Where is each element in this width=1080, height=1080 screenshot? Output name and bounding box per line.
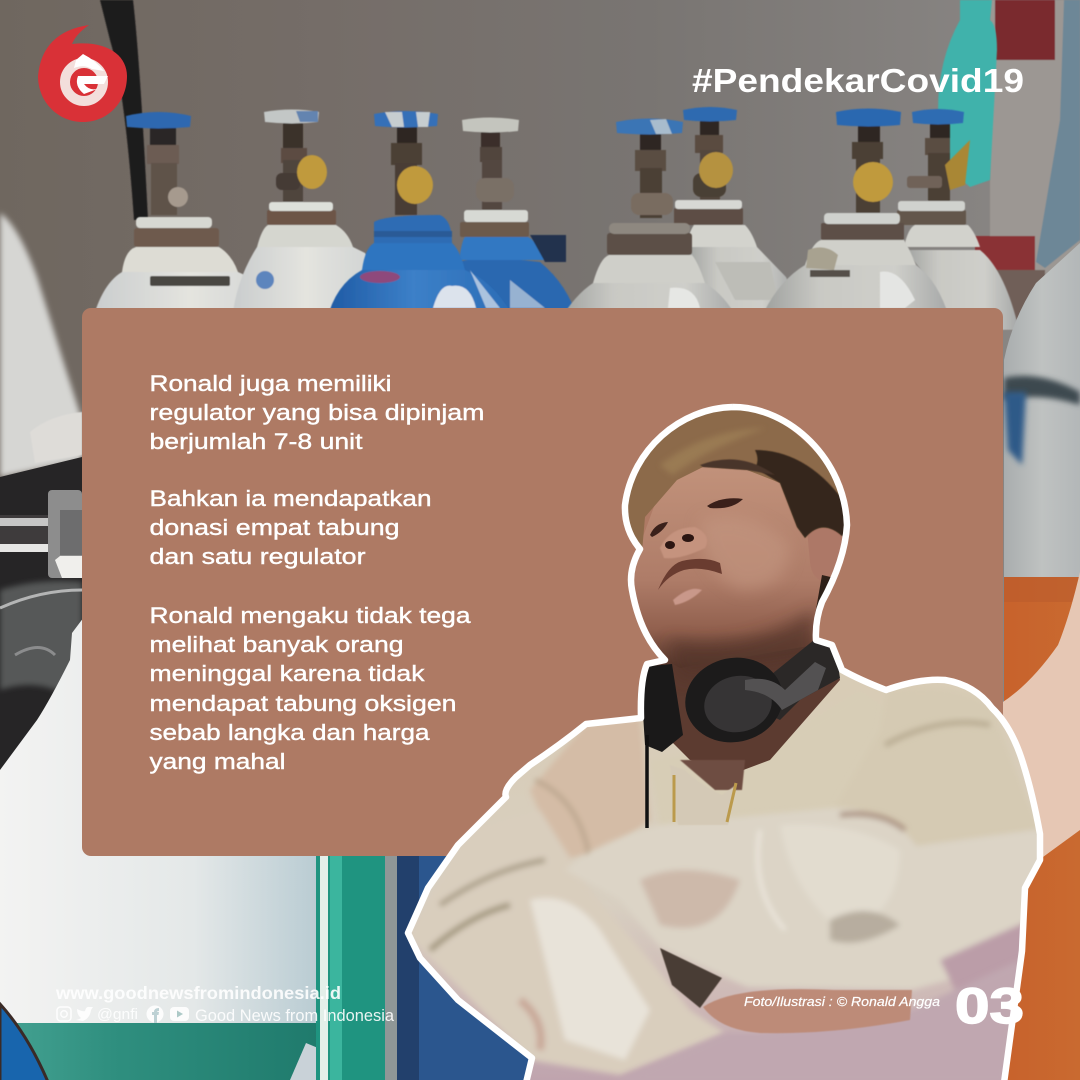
text block: body paragraphs: Bahkan ia mendapatkan — [150, 486, 432, 511]
icon: instagram — [57, 1007, 71, 1021]
text block: body paragraphs: yang mahal — [150, 749, 286, 774]
ear — [808, 536, 814, 558]
right upper arm — [856, 788, 1035, 844]
cylinder 6 — [674, 107, 795, 320]
page name: Good News from Indonesia — [195, 1007, 395, 1025]
left shoulder and sleeve — [408, 718, 725, 1075]
photo credit: Foto/Ilustrasi : © Ronald Angga — [744, 994, 940, 1009]
footer: website and social handles: www.goodnewsfromindonesia.id — [55, 983, 341, 1003]
page number: 03 — [955, 978, 1024, 1034]
headphones — [640, 640, 840, 752]
icon: twitter — [76, 1007, 93, 1021]
right side cylinder — [1004, 243, 1080, 1080]
left side dark equipment and fittings — [0, 412, 82, 780]
eyes, nose, mouth — [650, 498, 743, 605]
chest tattoo and collar — [680, 760, 745, 790]
person cutout: Ronald — [400, 405, 1050, 1080]
text block: body paragraphs: meninggal karena tidak — [150, 661, 425, 686]
text block: body paragraphs: dan satu regulator — [150, 544, 366, 569]
hashtag heading: #PendekarCovid19 — [692, 63, 1024, 100]
text block: body paragraphs: sebab langka dan harga — [150, 720, 430, 745]
text block: body paragraphs: donasi empat tabung — [150, 515, 400, 540]
arm raised behind the person — [1000, 572, 1080, 857]
chest — [650, 690, 900, 828]
hair — [628, 410, 842, 547]
text block: body paragraphs: Ronald juga memiliki — [150, 371, 392, 396]
icon: facebook — [146, 1006, 164, 1023]
headphone wire — [645, 735, 649, 828]
teal hanging device — [938, 0, 997, 187]
panel: brown text card — [82, 308, 1003, 856]
head skin — [636, 467, 818, 656]
blue cylinder 3 (front) — [327, 111, 515, 320]
green cylinder — [0, 1023, 318, 1080]
text block: body paragraphs: regulator yang bisa dipinjam — [150, 400, 484, 425]
text block: body paragraphs — [150, 371, 484, 774]
text block: body paragraphs: melihat banyak orang — [150, 632, 404, 657]
logo: red GNFI badge — [38, 25, 127, 122]
blue cylinder 4 (behind) — [459, 118, 578, 320]
white plastic jug — [0, 617, 322, 1024]
right shelving and red box — [975, 0, 1080, 330]
teal and navy cylinders — [316, 850, 547, 1080]
neck — [653, 646, 840, 770]
cylinder 8 — [897, 109, 1019, 330]
blue corner object — [0, 1004, 48, 1080]
lower shirt — [692, 966, 1016, 1048]
text block: body paragraphs: Ronald mengaku tidak tega — [150, 603, 471, 628]
crossed forearm — [565, 808, 1040, 1000]
forearm tattoo — [660, 948, 722, 1008]
cylinder 7 — [764, 108, 950, 320]
cylinder 1 — [90, 112, 290, 330]
black post — [100, 0, 148, 220]
text block: body paragraphs: berjumlah 7-8 unit — [150, 429, 363, 454]
text block: body paragraphs: mendapat tabung oksigen — [150, 691, 456, 716]
necklace — [674, 775, 736, 822]
white cutout outline — [408, 407, 1040, 1080]
footer: website and social handles — [55, 983, 395, 1025]
handle: @gnfi — [97, 1006, 138, 1023]
left pale object — [0, 213, 82, 477]
cylinder 5 — [560, 118, 738, 320]
sweater base — [400, 660, 1050, 1080]
hand — [703, 989, 912, 1033]
cylinder 2 — [232, 110, 380, 320]
icon: youtube — [170, 1007, 189, 1021]
